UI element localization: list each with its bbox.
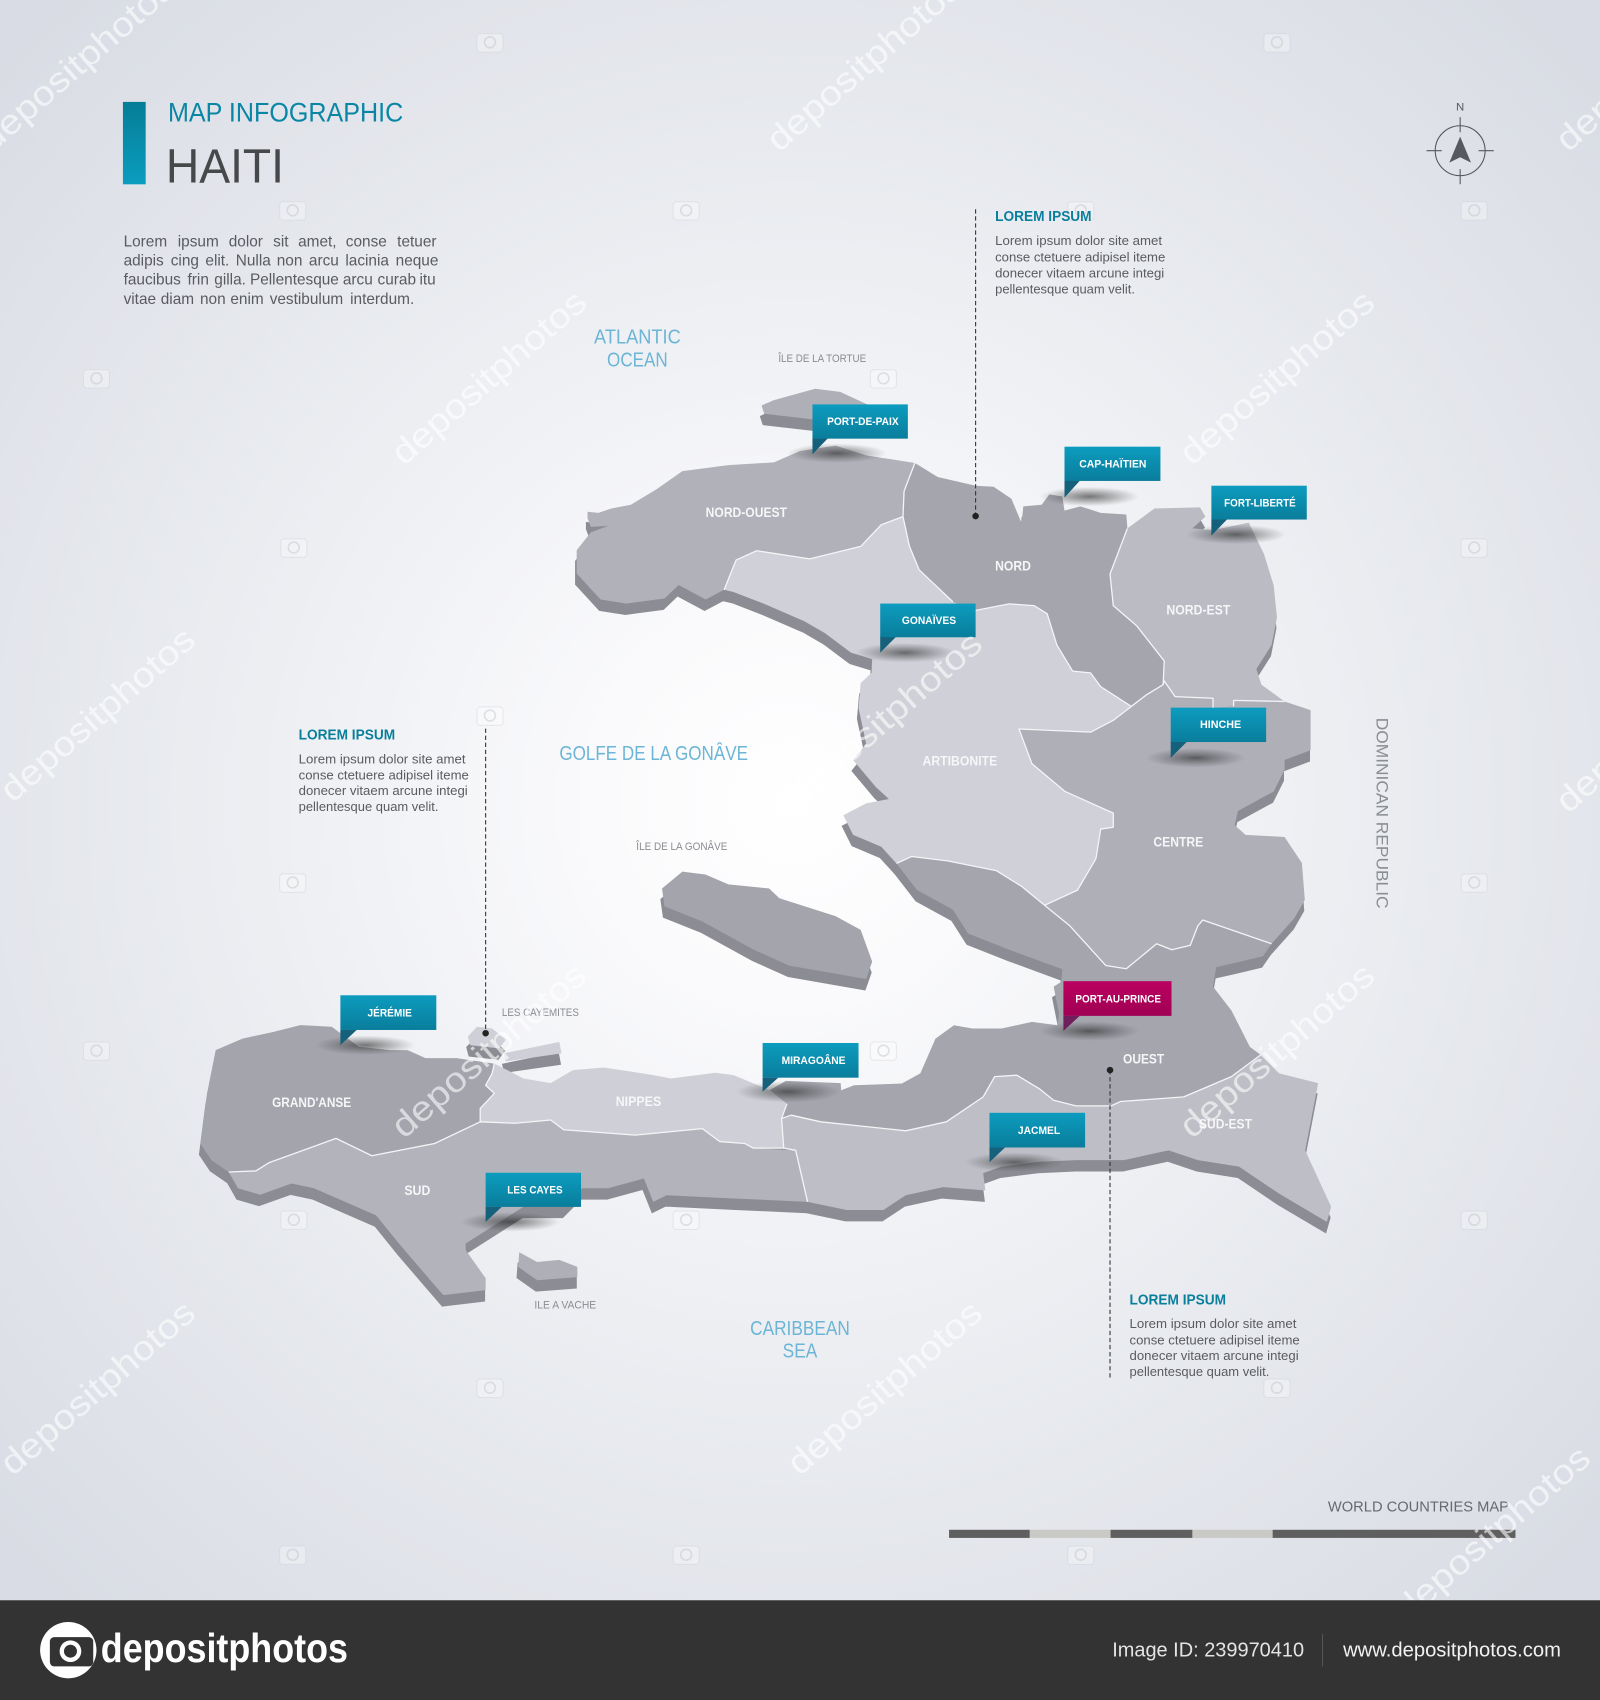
region labels: SUD-EST bbox=[1199, 1117, 1253, 1132]
intro paragraph: arcu bbox=[309, 253, 339, 270]
intro paragraph: Pellentesque bbox=[250, 272, 339, 289]
island: Ile a Vache bbox=[518, 1252, 577, 1280]
footer bar bbox=[0, 1600, 1600, 1700]
pin: Port-de-Paix bbox=[787, 404, 908, 463]
callout: south: pellentesque quam velit. bbox=[1130, 1364, 1269, 1379]
region labels: NORD bbox=[995, 558, 1031, 573]
region labels: ARTIBONITE bbox=[922, 753, 997, 768]
pin: Les Cayes: LES CAYES bbox=[507, 1185, 563, 1197]
pin: Cap-Haitien: CAP-HAÏTIEN bbox=[1079, 457, 1146, 470]
intro paragraph: ipsum bbox=[178, 234, 219, 251]
water labels: SEA bbox=[783, 1340, 818, 1362]
callout: north bbox=[972, 209, 1165, 519]
region: Nord-Ouest bbox=[577, 446, 915, 604]
scale label: WORLD COUNTRIES MAP bbox=[1328, 1498, 1509, 1515]
intro paragraph: frin bbox=[188, 272, 209, 289]
watermark camera icons bbox=[83, 34, 1487, 1564]
watermarks: depositphotos bbox=[1172, 283, 1382, 472]
intro paragraph: non bbox=[200, 291, 226, 308]
intro paragraph: diam bbox=[161, 291, 194, 308]
intro paragraph: enim bbox=[230, 291, 264, 308]
callout: south bbox=[1107, 1067, 1300, 1379]
subtitle: MAP INFOGRAPHIC bbox=[168, 96, 403, 127]
water labels bbox=[559, 327, 850, 1362]
watermarks: depositphotos bbox=[780, 1293, 990, 1483]
pin: Fort-Liberte bbox=[1186, 486, 1307, 544]
intro paragraph: Nulla bbox=[236, 253, 271, 270]
pin: Gonaives bbox=[855, 604, 976, 662]
intro paragraph: dolor bbox=[229, 234, 263, 251]
pin: Jacmel: JACMEL bbox=[1018, 1125, 1060, 1137]
callout: south: conse ctetuere adipisel iteme bbox=[1130, 1332, 1300, 1347]
watermarks: depositphotos bbox=[1388, 1439, 1598, 1628]
region: Sud-Est bbox=[782, 1055, 1331, 1222]
footer logo text: depositphotos bbox=[101, 1625, 348, 1671]
region labels: GRAND'ANSE bbox=[272, 1095, 351, 1110]
intro paragraph bbox=[124, 234, 438, 308]
callout: west: pellentesque quam velit. bbox=[299, 799, 438, 814]
region labels: NIPPES bbox=[616, 1094, 661, 1109]
region: Nord-Est bbox=[1110, 507, 1285, 708]
intro paragraph: conse bbox=[346, 234, 387, 251]
region labels: SUD bbox=[404, 1183, 431, 1198]
pin: Jeremie bbox=[315, 995, 436, 1055]
pin: Hinche: HINCHE bbox=[1200, 719, 1242, 731]
scale bar bbox=[949, 1530, 1515, 1538]
watermarks: depositphotos bbox=[780, 624, 990, 814]
island labels: ÎLE DE LA TORTUE bbox=[777, 352, 866, 365]
region labels: CENTRE bbox=[1153, 835, 1203, 850]
island: Les Cayemites large bbox=[468, 1027, 506, 1048]
callout: south: Lorem ipsum dolor site amet bbox=[1130, 1316, 1297, 1331]
pin: Hinche bbox=[1146, 708, 1266, 768]
title accent bar bbox=[123, 102, 146, 184]
pin: Miragoane bbox=[736, 1043, 859, 1103]
intro paragraph: cing bbox=[171, 253, 199, 270]
region labels: NORD-EST bbox=[1166, 603, 1231, 618]
intro paragraph: vestibulum bbox=[270, 291, 343, 308]
intro paragraph: curab bbox=[378, 272, 416, 289]
intro paragraph: adipis bbox=[124, 253, 164, 270]
compass: N bbox=[1456, 102, 1464, 114]
region: Centre bbox=[1019, 681, 1311, 969]
footer url: www.depositphotos.com bbox=[1342, 1639, 1561, 1662]
island labels: ÎLE DE LA GONÂVE bbox=[635, 840, 728, 853]
callout: north: LOREM IPSUM bbox=[995, 209, 1092, 225]
intro paragraph: itu bbox=[420, 272, 436, 289]
region: Sud bbox=[229, 1120, 808, 1295]
map of Haiti bbox=[201, 389, 1331, 1295]
pin: Port-au-Prince: PORT-AU-PRINCE bbox=[1075, 993, 1161, 1005]
intro paragraph: neque bbox=[396, 253, 438, 270]
callout: south: donecer vitaem arcune integi bbox=[1130, 1348, 1299, 1363]
island labels: ILE A VACHE bbox=[534, 1300, 597, 1312]
callout: west bbox=[299, 727, 489, 1036]
region labels bbox=[272, 505, 1253, 1198]
region: Nord bbox=[903, 463, 1164, 706]
pin: Port-au-Prince bbox=[1040, 981, 1171, 1041]
region labels: NORD-OUEST bbox=[706, 505, 788, 520]
intro paragraph: faucibus bbox=[124, 272, 181, 289]
title: HAITI bbox=[166, 140, 284, 194]
map extrusion bbox=[199, 400, 1330, 1306]
callout: south: LOREM IPSUM bbox=[1130, 1292, 1226, 1308]
callout: west: donecer vitaem arcune integi bbox=[299, 783, 468, 798]
island labels: LES CAYEMITES bbox=[502, 1007, 579, 1019]
water labels: GOLFE DE LA GONÂVE bbox=[559, 742, 748, 765]
region: Nippes bbox=[480, 1064, 787, 1148]
water labels: OCEAN bbox=[607, 349, 668, 371]
pin: Les Cayes bbox=[461, 1173, 581, 1232]
neighbour label: Dominican Republic: DOMINICAN REPUBLIC bbox=[1373, 718, 1391, 909]
intro paragraph: Lorem bbox=[124, 234, 167, 251]
callout: north: conse ctetuere adipisel iteme bbox=[995, 249, 1165, 264]
water labels: ATLANTIC bbox=[594, 327, 681, 349]
intro paragraph: elit. bbox=[205, 253, 229, 270]
pin: Cap-Haitien bbox=[1040, 447, 1160, 506]
footer separator bbox=[1321, 1634, 1323, 1666]
region borders bbox=[229, 463, 1285, 1202]
callout: north: Lorem ipsum dolor site amet bbox=[995, 233, 1162, 248]
footer logo icon bbox=[40, 1622, 96, 1678]
watermarks: depositphotos bbox=[384, 956, 594, 1146]
callout: west: LOREM IPSUM bbox=[299, 727, 395, 743]
intro paragraph: non bbox=[277, 253, 302, 270]
intro paragraph: interdum. bbox=[350, 291, 414, 308]
island: Les Cayemites small bbox=[504, 1042, 562, 1061]
region: Ouest bbox=[770, 857, 1272, 1131]
region: Grand'Anse bbox=[201, 1025, 494, 1172]
intro paragraph: tetuer bbox=[397, 234, 437, 251]
intro paragraph: vitae bbox=[124, 291, 156, 308]
watermarks: depositphotos bbox=[1172, 956, 1382, 1146]
compass bbox=[1427, 102, 1494, 184]
island: Ile de la Gonave bbox=[662, 872, 872, 979]
region: Artibonite bbox=[724, 517, 1131, 905]
region labels: OUEST bbox=[1123, 1052, 1165, 1067]
intro paragraph: amet, bbox=[298, 234, 337, 251]
callout: north: donecer vitaem arcune integi bbox=[995, 266, 1164, 281]
footer image id: Image ID: 239970410 bbox=[1112, 1639, 1304, 1662]
watermarks: depositphotos bbox=[384, 283, 594, 472]
island: Ile de la Tortue bbox=[762, 389, 905, 421]
pin: Jeremie: JÉRÉMIE bbox=[367, 1006, 412, 1019]
intro paragraph: lacinia bbox=[345, 253, 389, 270]
pin: Port-de-Paix: PORT-DE-PAIX bbox=[827, 416, 899, 428]
callout: north: pellentesque quam velit. bbox=[995, 281, 1135, 296]
island labels bbox=[502, 352, 866, 1312]
pin: Fort-Liberte: FORT-LIBERTÉ bbox=[1224, 496, 1296, 509]
pin: Gonaives: GONAÏVES bbox=[902, 614, 956, 627]
callout: west: Lorem ipsum dolor site amet bbox=[299, 751, 466, 766]
callout: west: conse ctetuere adipisel iteme bbox=[299, 768, 469, 783]
intro paragraph: arcu bbox=[343, 272, 373, 289]
pin: Miragoane: MIRAGOÂNE bbox=[782, 1054, 846, 1067]
intro paragraph: sit bbox=[273, 234, 289, 251]
intro paragraph: gilla. bbox=[214, 272, 246, 289]
water labels: CARIBBEAN bbox=[750, 1318, 850, 1340]
pin: Jacmel bbox=[965, 1113, 1085, 1172]
